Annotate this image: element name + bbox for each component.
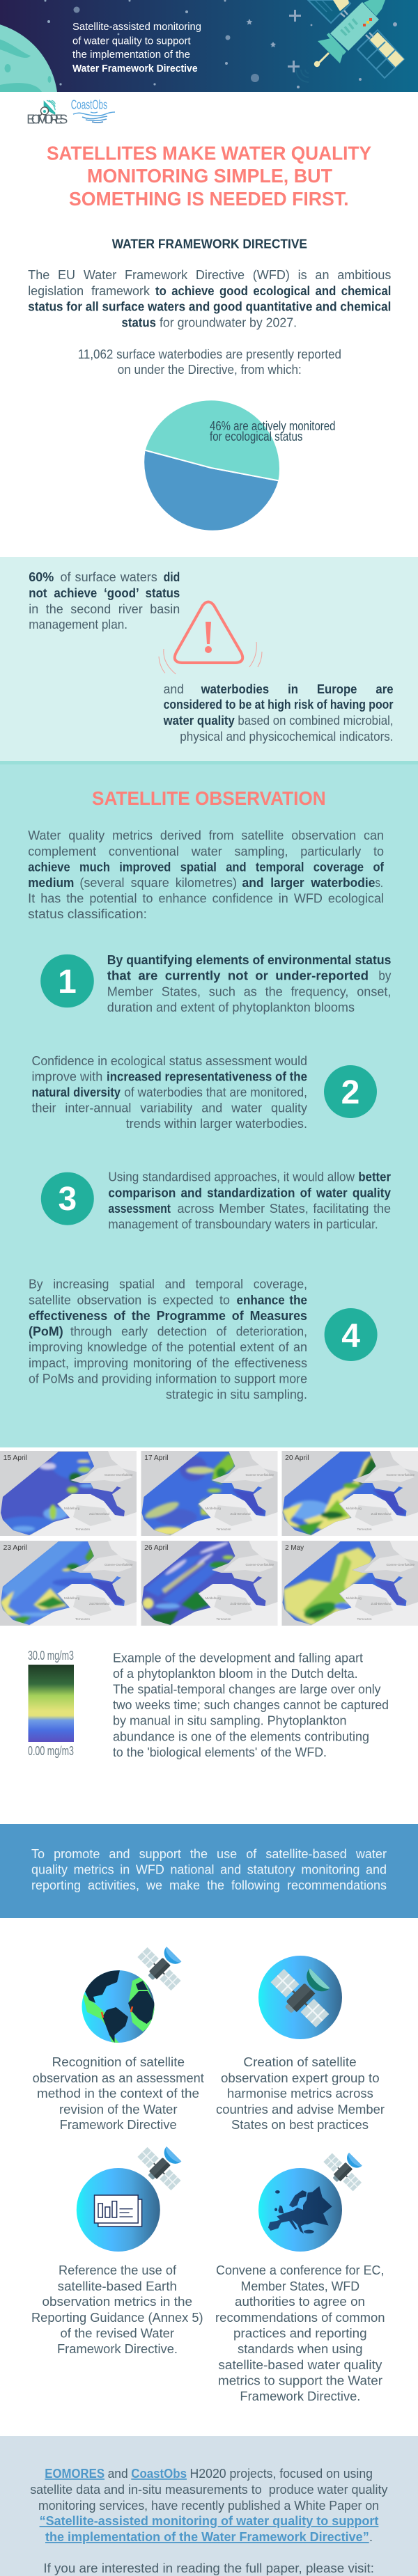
text: recommendation 3: Framework Directive.: [57, 2342, 178, 2356]
text: white paper note: EOMORES: [45, 2467, 104, 2481]
text: point 1: [107, 953, 391, 1014]
text: WFD intro: for groundwater by 2027.: [160, 315, 297, 329]
text: recommendation 4: [215, 2263, 385, 2403]
header title: Water Framework Directive: [72, 63, 198, 74]
text: point 3: management of transboundary waters in particular.: [108, 1218, 378, 1232]
text: recommendation 4: authorities to agree on: [235, 2295, 365, 2309]
panel: white paper: [0, 2436, 418, 2576]
text: recommendation 4: standards when using: [238, 2342, 362, 2356]
text: point 3: Using standardised approaches, it would allow: [108, 1170, 355, 1184]
map labels: [346, 1563, 415, 1621]
text: point 1: By quantifying elements of environmental status: [107, 953, 391, 967]
badge: 2: 2: [341, 1074, 359, 1111]
header title: of water quality to support: [72, 35, 191, 47]
map labels: Zuid-Beveland: [230, 1602, 251, 1605]
map labels: Zuid-Beveland: [89, 1602, 110, 1605]
text: point 3: [108, 1170, 391, 1232]
text: recommendation 3: observation metrics in the: [42, 2295, 192, 2309]
text: introduction: medium: [28, 876, 74, 890]
map labels: [64, 1473, 133, 1531]
map labels: Zuid-Beveland: [230, 1512, 251, 1516]
banner: recommendations intro: [0, 1824, 418, 1918]
map: 17 April: 17 April: [144, 1454, 169, 1462]
panel: satellite observation: [0, 761, 418, 1447]
text: WFD intro: The EU Water Framework Directive (WFD) is an ambitious: [28, 268, 391, 282]
text: point 2: Confidence in ecological status assessment would: [32, 1054, 307, 1068]
logo: EOMORES: [26, 100, 68, 127]
text: WFD intro: legislation framework: [28, 284, 150, 298]
text: point 4: improving knowledge of the potential extent of an: [29, 1340, 307, 1354]
text: high risk: physical and physicochemical indicators.: [180, 730, 393, 744]
text: map caption: The spatial-temporal changes are large over only: [113, 1682, 380, 1696]
map labels: Terneuzen: [216, 1527, 231, 1531]
text: white paper note: the implementation of the Water Framework Directive”: [45, 2530, 369, 2544]
text: recommendation 3: of the revised Water: [60, 2327, 174, 2341]
badge: 4: 4: [341, 1318, 360, 1355]
text: recommendation 3: [31, 2263, 203, 2356]
badge: 1: 1: [58, 964, 77, 1000]
badge: 3: [41, 1172, 94, 1225]
text: point 4: satellite observation is expected to: [29, 1293, 230, 1307]
text: high risk: and: [164, 682, 184, 696]
text: map caption: of a phytoplankton bloom in the Dutch delta.: [113, 1667, 358, 1681]
text: map caption: Example of the development and falling apart: [113, 1651, 363, 1665]
text: recommendation 1: [33, 2055, 204, 2132]
map: 26 April: 26 April: [144, 1544, 169, 1552]
header title: Satellite-assisted monitoring: [72, 21, 201, 33]
text: point 2: of waterbodies that are monitored,: [124, 1085, 307, 1099]
color scale legend: [28, 1649, 74, 1758]
pie label: [210, 419, 335, 443]
panel: water status: [0, 557, 418, 761]
text: recommendation 2: [216, 2055, 385, 2132]
text: high risk: based on combined microbial,: [238, 714, 393, 728]
main title: [47, 142, 371, 210]
text: point 4: By increasing spatial and temporal coverage,: [29, 1278, 307, 1291]
heading: water framework directive: WATER FRAMEWORK DIRECTIVE: [112, 237, 307, 251]
text: white paper note: H2020 projects, focused on using: [189, 2467, 373, 2481]
main title: MONITORING SIMPLE, BUT: [87, 165, 332, 187]
map: 23 April: 23 April: [3, 1544, 27, 1552]
map labels: Zuid-Beveland: [89, 1512, 110, 1516]
text: point 3: better: [358, 1170, 391, 1184]
text: 60 percent: not achieve ‘good’ status: [29, 586, 180, 600]
map labels: [64, 1563, 133, 1621]
text: point 2: natural diversity: [32, 1085, 121, 1099]
text: 60 percent: management plan.: [29, 618, 127, 631]
text: recommendation 4: metrics to support the Water: [218, 2374, 382, 2388]
banner: recommendations intro: quality metrics in WFD national and statutory monitoring and: [31, 1863, 387, 1877]
text: recommendation 2: States on best practices: [231, 2118, 369, 2132]
map: 17 April: [141, 1451, 277, 1536]
map: 2 May: [281, 1541, 418, 1626]
text: white paper note: satellite data and in-situ measurements to produce water quality: [30, 2483, 387, 2497]
text: 60 percent: 60%: [29, 570, 54, 584]
color scale legend: 0.00 mg/m3: [28, 1744, 74, 1758]
Europe silhouette: [268, 2186, 332, 2233]
text: point 2: increased representativeness of the: [107, 1069, 307, 1083]
text: high risk: water quality: [163, 714, 235, 728]
map labels: Terneuzen: [357, 1527, 372, 1531]
logo: CoastObs: [71, 97, 115, 123]
text: WFD intro: status for all surface waters and good quantitative and chemical: [28, 300, 391, 314]
text: point 1: by: [378, 969, 391, 983]
map labels: Middelburg: [346, 1507, 362, 1510]
map labels: Zuid-Beveland: [371, 1602, 392, 1605]
map labels: Goeree-Overflakkee: [386, 1473, 415, 1477]
icon: earth with satellite: [82, 1947, 181, 2043]
map labels: Middelburg: [64, 1507, 80, 1510]
text: waterbodies reported: [78, 347, 341, 377]
text: point 1: Member States, such as the frequency, onset,: [107, 984, 391, 998]
text: map caption: abundance is one of the elements contributing: [113, 1729, 369, 1743]
text: map caption: two weeks time; such changes cannot be captured: [113, 1698, 389, 1712]
text: recommendation 4: recommendations of common: [215, 2311, 385, 2325]
text: point 2: improve with: [32, 1069, 102, 1083]
map labels: Goeree-Overflakkee: [245, 1563, 274, 1566]
decorative stars: [45, 0, 397, 88]
map labels: Terneuzen: [216, 1617, 231, 1621]
main title: SOMETHING IS NEEDED FIRST.: [69, 188, 349, 210]
map labels: Terneuzen: [357, 1617, 372, 1621]
text: high risk: considered to be at high risk of having poor: [164, 698, 393, 712]
text: introduction: Water quality metrics derived from satellite observation can: [28, 828, 384, 842]
text: white paper note: If you are interested in reading the full paper, please visit:: [43, 2561, 374, 2575]
header title: the implementation of the: [72, 49, 190, 61]
text: white paper note: [30, 2467, 387, 2575]
text: 60 percent: did: [164, 570, 180, 584]
map labels: Goeree-Overflakkee: [104, 1473, 133, 1477]
icon: Europe in globe: [258, 2144, 371, 2252]
text: map caption: by manual in situ sampling. Phytoplankton: [113, 1714, 347, 1728]
text: introduction: It has the potential to enhance confidence in WFD ecological: [28, 892, 384, 906]
text: white paper note: and: [108, 2467, 128, 2481]
text: WFD intro: [28, 268, 391, 329]
text: recommendation 3: Reference the use of: [59, 2263, 177, 2277]
icon: satellite: [320, 2144, 371, 2194]
text: recommendation 4: Member States, WFD: [241, 2279, 359, 2293]
text: recommendation 1: method in the context of the: [37, 2087, 199, 2100]
map labels: [346, 1473, 415, 1531]
text: point 4: effectiveness of the Programme of Measures: [29, 1309, 307, 1323]
map labels: [205, 1473, 274, 1531]
banner: recommendations intro: reporting activities, we make the following recommendations: [31, 1878, 387, 1892]
pie label: 46% are actively monitored: [210, 419, 335, 433]
icon: satellite: [134, 2137, 191, 2194]
text: point 4: (PoM): [29, 1325, 63, 1339]
map labels: Middelburg: [64, 1596, 80, 1600]
icon: satellite in globe: [258, 1956, 343, 2039]
text: white paper note: monitoring services, have recently published a White Paper on: [38, 2499, 379, 2513]
text: introduction: and larger waterbodie: [242, 876, 375, 890]
map labels: Middelburg: [205, 1596, 221, 1600]
text: point 2: [32, 1054, 307, 1131]
text: point 3: comparison and standardization of water quality: [108, 1186, 391, 1200]
text: recommendation 1: observation as an assessment: [33, 2071, 204, 2085]
icon: warning triangle: [159, 602, 262, 674]
text: waterbodies reported: on under the Directive, from which:: [118, 363, 302, 377]
text: high risk: [163, 682, 393, 744]
text: point 4: through early detection of deterioration,: [70, 1325, 307, 1339]
planet: [0, 24, 57, 92]
text: WFD intro: to achieve good ecological and chemical: [155, 284, 391, 298]
text: point 3: across Member States, facilitating the: [177, 1202, 391, 1216]
text: 60 percent: in the second river basin: [29, 602, 180, 616]
map: 23 April: [0, 1541, 137, 1626]
badge: 1: [40, 955, 94, 1007]
header title: [72, 21, 201, 74]
text: waterbodies reported: 11,062 surface waterbodies are presently reported: [78, 347, 341, 361]
header banner: [0, 0, 418, 92]
text: introduction: achieve much improved spatial and temporal coverage of: [28, 861, 385, 874]
text: 60 percent: [29, 570, 180, 631]
text: point 4: [29, 1278, 307, 1401]
text: point 2: their inter-annual variability and water quality: [32, 1101, 307, 1115]
text: introduction: (several square kilometres): [79, 876, 237, 890]
pie chart: [144, 400, 335, 531]
text: point 4: of PoMs and providing information to support more: [29, 1372, 307, 1386]
pie label: for ecological status: [210, 430, 302, 443]
color scale legend: 30.0 mg/m3: [28, 1649, 74, 1663]
text: recommendation 2: harmonise metrics across: [227, 2087, 373, 2100]
logo: CoastObs: CoastObs: [71, 97, 107, 111]
text: high risk: waterbodies in Europe are: [201, 682, 393, 696]
map labels: Goeree-Overflakkee: [386, 1563, 415, 1566]
icon: report in globe: [77, 2137, 191, 2252]
satellite illustration: [296, 0, 404, 82]
text: point 4: enhance the: [237, 1293, 307, 1307]
main title: SATELLITES MAKE WATER QUALITY: [47, 142, 371, 164]
text: recommendation 4: practices and reporting: [233, 2327, 367, 2341]
text: introduction: s.: [375, 876, 383, 890]
heading: satellite observation: SATELLITE OBSERVATION: [92, 787, 326, 809]
map: 15 April: 15 April: [3, 1454, 27, 1462]
banner: recommendations intro: To promote and support the use of satellite-based water: [31, 1847, 387, 1861]
text: point 2: trends within larger waterbodies.: [126, 1117, 307, 1131]
logo: EOMORES: EOMORES: [26, 113, 68, 127]
badge: 2: [324, 1065, 377, 1118]
text: recommendation 4: Convene a conference for EC,: [216, 2263, 385, 2277]
text: WFD intro: status: [121, 315, 156, 329]
text: introduction: [28, 828, 385, 921]
map: 15 April: [0, 1448, 137, 1536]
map labels: Middelburg: [346, 1596, 362, 1600]
map: 20 April: [281, 1451, 418, 1536]
text: point 4: impact, improving monitoring of the effectiveness: [29, 1356, 307, 1370]
map labels: Goeree-Overflakkee: [104, 1563, 133, 1566]
icon: satellite: [134, 1938, 191, 1995]
map: 20 April: 20 April: [285, 1454, 309, 1462]
map labels: Zuid-Beveland: [371, 1512, 392, 1516]
map labels: Goeree-Overflakkee: [245, 1473, 274, 1477]
text: recommendation 1: revision of the Water: [59, 2103, 177, 2116]
text: point 4: strategic in situ sampling.: [166, 1388, 307, 1401]
map labels: Terneuzen: [75, 1617, 91, 1621]
map labels: [205, 1563, 274, 1621]
text: recommendation 4: satellite-based water quality: [218, 2358, 382, 2372]
text: introduction: complement conventional water sampling, particularly to: [28, 845, 384, 858]
text: recommendation 4: Framework Directive.: [240, 2389, 360, 2403]
map: 2 May: 2 May: [285, 1544, 304, 1552]
map: 26 April: [141, 1541, 277, 1626]
text: map caption: to the 'biological elements' of the WFD.: [113, 1745, 327, 1759]
text: recommendation 2: Creation of satellite: [243, 2055, 357, 2069]
text: white paper note: .: [369, 2530, 373, 2544]
text: point 1: duration and extent of phytoplankton blooms: [107, 1000, 355, 1014]
text: recommendation 3: satellite-based Earth: [58, 2279, 177, 2293]
text: recommendation 2: countries and advise Member: [216, 2103, 385, 2116]
text: white paper note: “Satellite-assisted monitoring of water quality to support: [40, 2514, 378, 2528]
map labels: Middelburg: [205, 1507, 221, 1510]
badge: 4: [325, 1308, 378, 1361]
text: map caption: [113, 1651, 389, 1759]
text: point 1: that are currently not or under-reported: [107, 969, 369, 983]
badge: 3: 3: [58, 1181, 77, 1218]
map labels: Terneuzen: [75, 1527, 91, 1531]
text: recommendation 3: Reporting Guidance (Annex 5): [31, 2311, 203, 2325]
text: recommendation 1: Recognition of satellite: [52, 2055, 185, 2069]
text: recommendation 2: observation expert group to: [221, 2071, 380, 2085]
text: introduction: status classification:: [28, 907, 147, 921]
text: recommendation 1: Framework Directive: [60, 2118, 177, 2132]
text: 60 percent: of surface waters: [60, 570, 157, 584]
text: point 3: assessment: [108, 1202, 171, 1216]
text: white paper note: CoastObs: [131, 2467, 187, 2481]
